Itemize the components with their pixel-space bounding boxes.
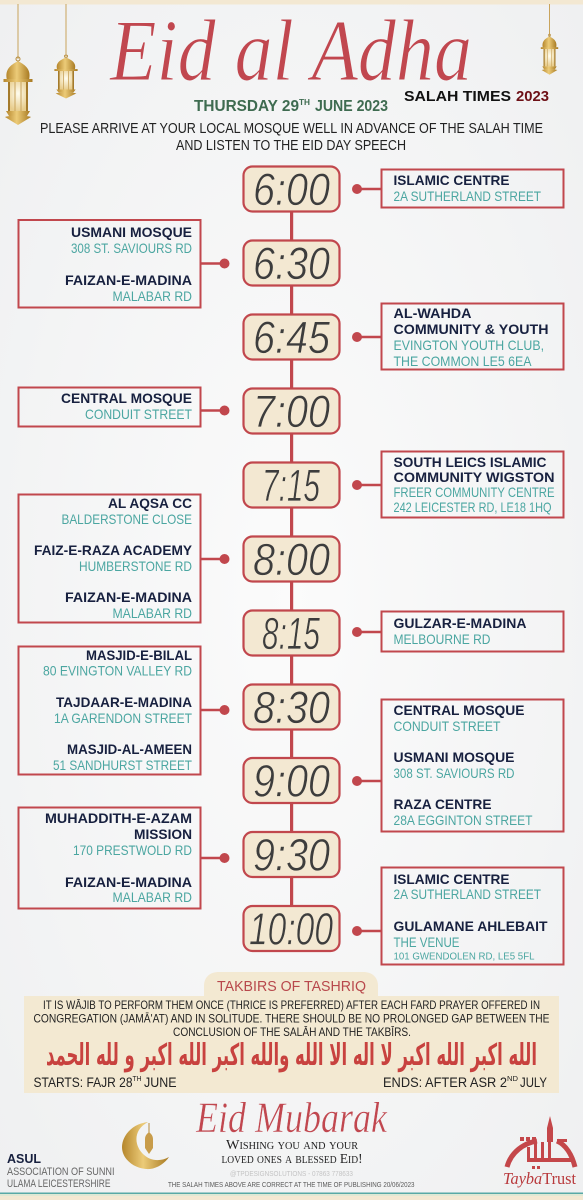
takbirs explanation: CONCLUSION OF THE SALĀH AND THE TAKBĪRS. bbox=[173, 1025, 411, 1039]
lantern: large left bbox=[4, 4, 32, 125]
starts: JUNE bbox=[144, 1074, 176, 1090]
ends: ND bbox=[507, 1076, 518, 1083]
panel: takbirs of tashriq bbox=[24, 972, 559, 1093]
clock 6:00: 6:00 bbox=[253, 164, 330, 215]
panel: 8:30 mosques: MASJID-AL-AMEEN bbox=[67, 741, 192, 757]
icon: gold crescent and lantern bbox=[122, 1122, 169, 1169]
logo: tayba trust: TaybaTrust bbox=[503, 1169, 576, 1188]
panel: 7:15 mosques: COMMUNITY WIGSTON bbox=[394, 469, 554, 485]
blessing: loved ones a blessed Eid! bbox=[222, 1152, 362, 1167]
takbirs heading: TAKBIRS OF TASHRIQ bbox=[217, 978, 366, 995]
panel: 10:00 mosques: 2A SUTHERLAND STREET bbox=[394, 886, 541, 902]
panel: 7:15 mosques: SOUTH LEICS ISLAMIC bbox=[394, 454, 546, 470]
panel: 6:45 mosques bbox=[352, 304, 564, 370]
clock 6:45: 6:45 bbox=[253, 312, 331, 363]
panel: 6:00 mosques: ISLAMIC CENTRE bbox=[394, 172, 510, 188]
panel: 7:00 mosques: CONDUIT STREET bbox=[85, 406, 192, 422]
panel: 9:30 mosques: MALABAR RD bbox=[112, 889, 192, 905]
panel: 6:30 mosques: FAIZAN-E-MADINA bbox=[65, 272, 192, 288]
asul credit: ASUL bbox=[7, 1151, 41, 1166]
panel: 6:30 mosques: 308 ST. SAVIOURS RD bbox=[71, 240, 192, 256]
panel: 8:00 mosques: FAIZ-E-RAZA ACADEMY bbox=[34, 542, 193, 558]
blessing: Wishing you and your bbox=[226, 1138, 358, 1153]
panel: 9:00 mosques: 308 ST. SAVIOURS RD bbox=[394, 765, 514, 781]
panel: 9:00 mosques: CONDUIT STREET bbox=[394, 718, 501, 734]
panel: 9:30 mosques: MISSION bbox=[134, 826, 192, 842]
ends: ENDS: AFTER ASR 2 bbox=[383, 1074, 507, 1090]
lantern: medium left bbox=[54, 4, 78, 99]
designer credit: @TPDESIGNSOLUTIONS - 07863 778633 bbox=[230, 1171, 353, 1178]
panel: 8:15 mosques: GULZAR-E-MADINA bbox=[394, 615, 526, 631]
panel: 10:00 mosques: GULAMANE AHLEBAIT bbox=[394, 918, 548, 934]
panel: 7:00 mosques bbox=[18, 388, 230, 426]
logo: tayba trust bbox=[503, 1116, 576, 1188]
clock 8:15: 8:15 bbox=[262, 608, 321, 659]
panel: 6:45 mosques: EVINGTON YOUTH CLUB, bbox=[394, 337, 544, 353]
asul credit bbox=[7, 1151, 114, 1190]
notice bbox=[40, 121, 543, 154]
panel: 7:00 mosques: CENTRAL MOSQUE bbox=[61, 390, 192, 406]
panel: 6:45 mosques: THE COMMON LE5 6EA bbox=[394, 353, 532, 369]
panel: 8:00 mosques: MALABAR RD bbox=[112, 605, 192, 621]
subtitle: salah times: SALAH TIMES bbox=[404, 89, 511, 105]
panel: 8:30 mosques: 1A GARENDON STREET bbox=[54, 710, 192, 726]
notice: AND LISTEN TO THE EID DAY SPEECH bbox=[176, 138, 406, 154]
clock 7:00: 7:00 bbox=[253, 386, 330, 437]
panel: 6:30 mosques bbox=[18, 220, 230, 308]
panel: 8:00 mosques: FAIZAN-E-MADINA bbox=[65, 589, 192, 605]
date: JUNE 2023 bbox=[315, 98, 388, 115]
panel: 8:30 mosques: 80 EVINGTON VALLEY RD bbox=[43, 662, 192, 678]
asul credit: ASSOCIATION OF SUNNI bbox=[7, 1166, 114, 1178]
panel: 8:30 mosques: 51 SANDHURST STREET bbox=[53, 757, 192, 773]
panel: 9:30 mosques: FAIZAN-E-MADINA bbox=[65, 874, 192, 890]
title: Eid al Adha bbox=[108, 3, 472, 100]
panel: 9:00 mosques bbox=[352, 700, 564, 832]
panel: 10:00 mosques: ISLAMIC CENTRE bbox=[394, 871, 510, 887]
starts: TH bbox=[132, 1076, 142, 1083]
panel: 6:45 mosques: COMMUNITY & YOUTH bbox=[394, 321, 548, 337]
panel: 8:00 mosques: AL AQSA CC bbox=[108, 495, 192, 511]
panel: 8:00 mosques: BALDERSTONE CLOSE bbox=[62, 511, 192, 527]
panel: 8:30 mosques: TAJDAAR-E-MADINA bbox=[56, 694, 192, 710]
panel: 9:30 mosques: MUHADDITH-E-AZAM bbox=[45, 810, 192, 826]
panel: 8:00 mosques: HUMBERSTONE RD bbox=[79, 558, 192, 574]
ends: JULY bbox=[520, 1074, 548, 1090]
lantern: small right bbox=[541, 4, 558, 75]
subtitle: salah times bbox=[404, 89, 549, 105]
panel: 6:45 mosques: AL-WAHDA bbox=[394, 305, 472, 321]
blessing bbox=[222, 1138, 362, 1167]
timeline spine bbox=[290, 212, 293, 905]
clock 10:00: 10:00 bbox=[249, 904, 333, 954]
clock 8:30: 8:30 bbox=[253, 682, 330, 733]
clock 6:30: 6:30 bbox=[253, 238, 330, 289]
clock 7:15: 7:15 bbox=[262, 460, 321, 511]
panel: 10:00 mosques bbox=[352, 868, 564, 964]
clock 9:30: 9:30 bbox=[253, 830, 330, 880]
takbirs explanation bbox=[34, 998, 550, 1039]
panel: 6:30 mosques: USMANI MOSQUE bbox=[71, 224, 192, 240]
panel: 8:30 mosques: MASJID-E-BILAL bbox=[86, 647, 192, 663]
panel: 10:00 mosques: THE VENUE bbox=[394, 934, 460, 950]
clock 9:00: 9:00 bbox=[253, 756, 330, 806]
date: TH bbox=[299, 98, 310, 107]
panel: 8:15 mosques bbox=[352, 612, 564, 652]
clock 8:00: 8:00 bbox=[253, 534, 330, 585]
eid mubarak script: Eid Mubarak bbox=[195, 1095, 388, 1142]
panel: 6:00 mosques bbox=[352, 170, 564, 208]
panel: 9:30 mosques: 170 PRESTWOLD RD bbox=[73, 842, 192, 858]
panel: 7:15 mosques bbox=[352, 452, 564, 518]
panel: 9:00 mosques: CENTRAL MOSQUE bbox=[394, 702, 524, 718]
date: THURSDAY 29 bbox=[194, 98, 299, 115]
starts: STARTS: FAJR 28 bbox=[34, 1074, 133, 1090]
panel: 8:00 mosques bbox=[18, 494, 230, 622]
panel: 9:00 mosques: USMANI MOSQUE bbox=[394, 749, 514, 765]
panel: 6:00 mosques: 2A SUTHERLAND STREET bbox=[394, 188, 541, 204]
panel: 6:30 mosques: MALABAR RD bbox=[112, 288, 192, 304]
date bbox=[194, 98, 388, 115]
panel: 8:15 mosques: MELBOURNE RD bbox=[394, 631, 490, 647]
panel: 9:00 mosques: 28A EGGINTON STREET bbox=[394, 812, 533, 828]
panel: 9:00 mosques: RAZA CENTRE bbox=[394, 796, 492, 812]
publishing note: THE SALAH TIMES ABOVE ARE CORRECT AT THE TIME OF PUBLISHING 20/06/2023 bbox=[168, 1180, 414, 1189]
panel: 8:30 mosques bbox=[18, 646, 230, 774]
asul credit: ULAMA LEICESTERSHIRE bbox=[7, 1178, 110, 1190]
subtitle: salah times: 2023 bbox=[516, 89, 549, 105]
panel: 9:30 mosques bbox=[18, 808, 230, 908]
panel: 10:00 mosques: 101 GWENDOLEN RD, LE5 5FL bbox=[394, 950, 535, 962]
